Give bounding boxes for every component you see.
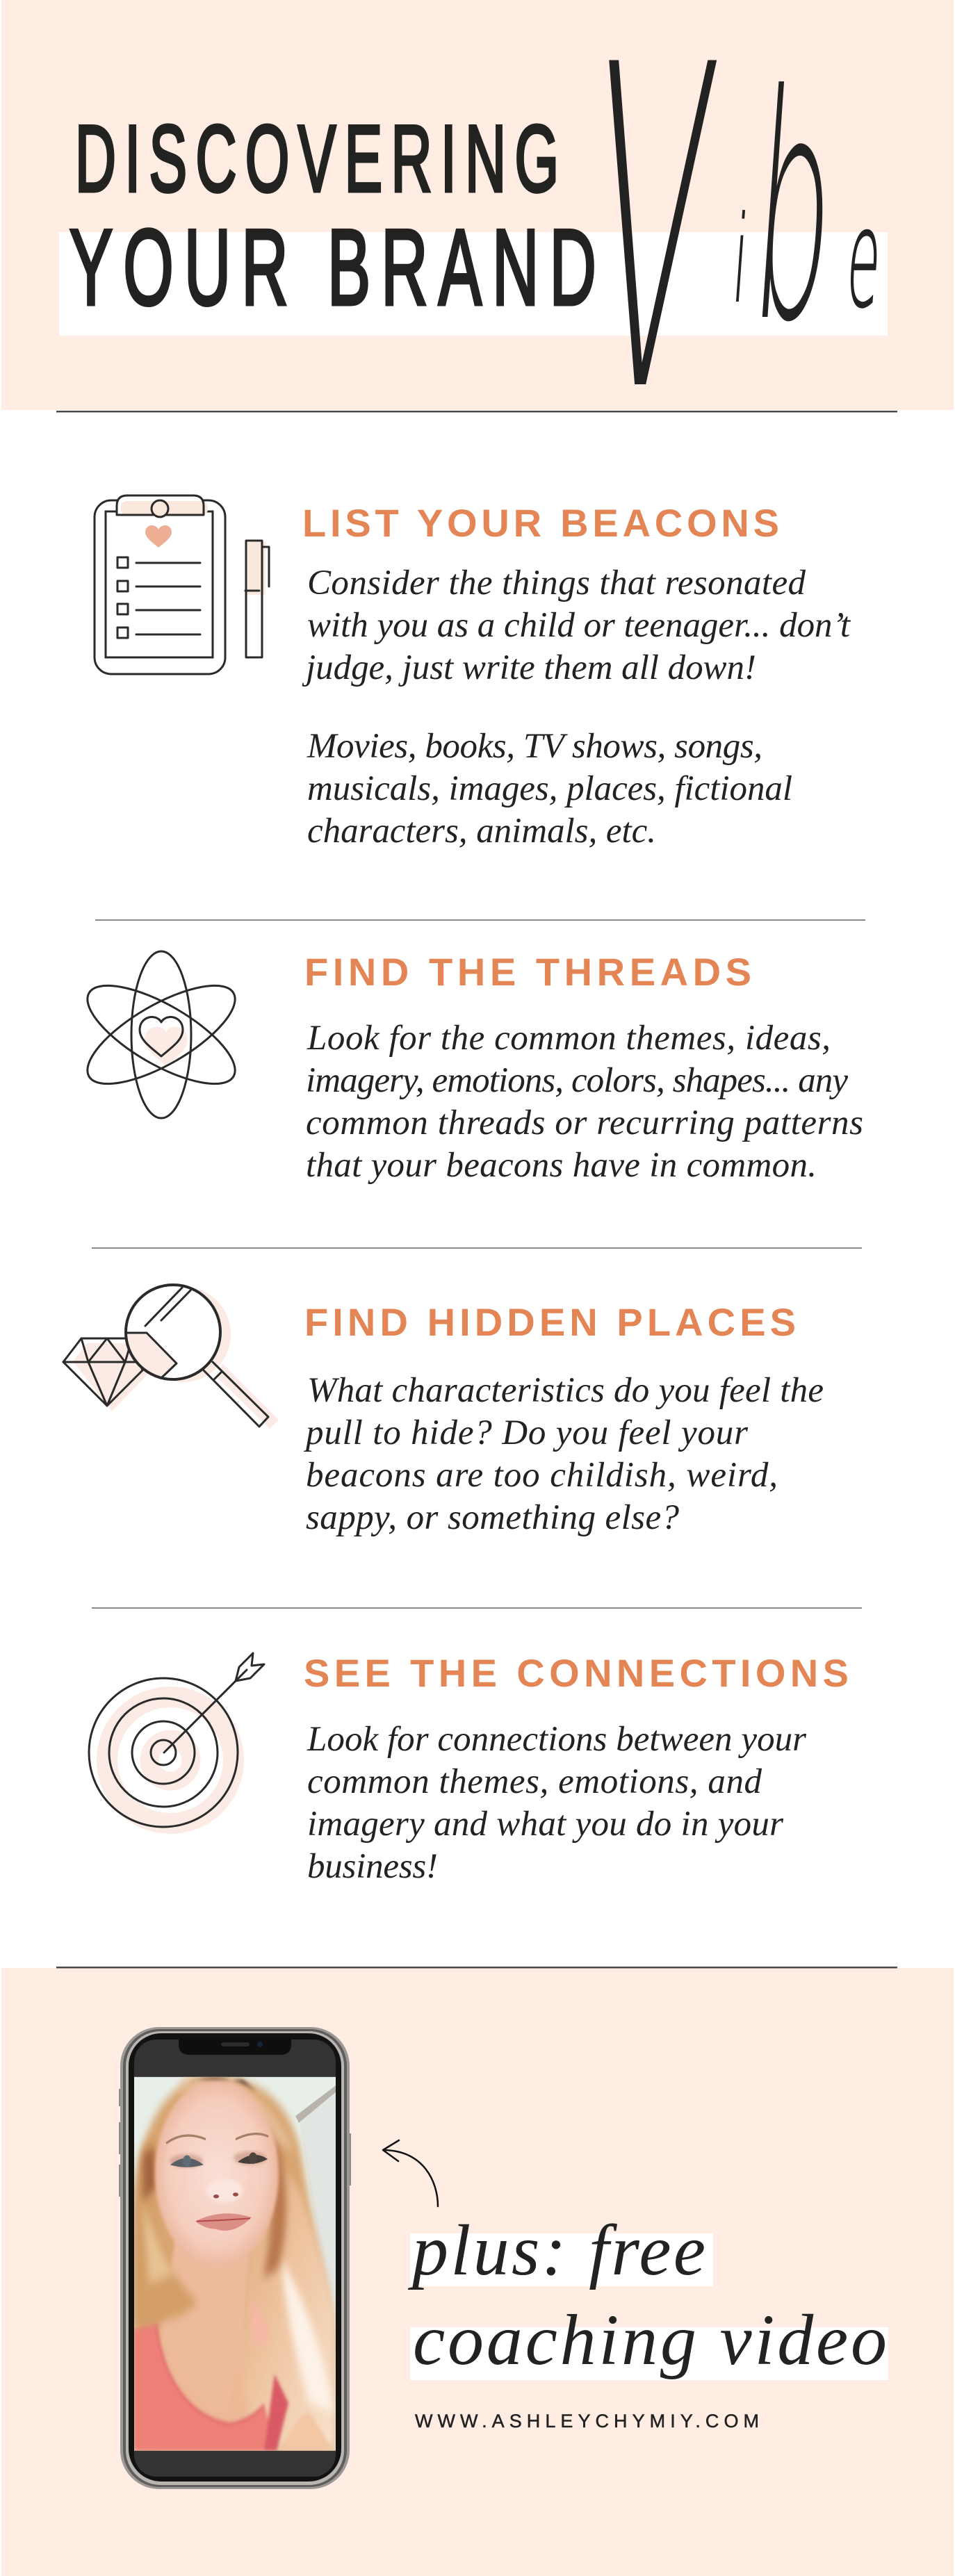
shirt bbox=[134, 2322, 277, 2451]
phone mockup bbox=[119, 2027, 351, 2489]
icon: atom with heart bbox=[74, 951, 248, 1118]
heading: FIND THE THREADS bbox=[304, 950, 751, 994]
hair right mass bbox=[240, 2161, 336, 2448]
body text: Look for the common themes, ideas, bbox=[307, 1019, 831, 1058]
heading: SEE THE CONNECTIONS bbox=[304, 1651, 849, 1695]
face bbox=[155, 2080, 279, 2267]
body text: characters, animals, etc. bbox=[307, 812, 656, 851]
title: script word vibe: i bbox=[729, 190, 752, 329]
section 2: find the threads bbox=[74, 950, 863, 1185]
body text: pull to hide? Do you feel your bbox=[304, 1413, 748, 1452]
hair back bbox=[134, 2077, 336, 2451]
chest bbox=[157, 2324, 279, 2451]
website url: WWW.ASHLEYCHYMIY.COM bbox=[415, 2411, 759, 2431]
body text: beacons are too childish, weird, bbox=[306, 1456, 778, 1495]
body text: with you as a child or teenager... don’t bbox=[307, 606, 851, 645]
body text: imagery and what you do in your bbox=[307, 1805, 783, 1844]
body text: judge, just write them all down! bbox=[302, 648, 756, 687]
body text: business! bbox=[307, 1847, 438, 1886]
section 3: find hidden places bbox=[63, 1284, 824, 1537]
heading: LIST YOUR BEACONS bbox=[302, 501, 779, 545]
body text: that your beacons have in common. bbox=[306, 1146, 817, 1185]
body text bbox=[306, 1019, 863, 1185]
section 4: see the connections bbox=[89, 1651, 849, 1886]
icon: target and arrow bbox=[89, 1653, 264, 1827]
icon: diamond and magnifying glass bbox=[63, 1284, 279, 1429]
header panel bbox=[1, 0, 954, 489]
heading: FIND HIDDEN PLACES bbox=[304, 1300, 796, 1344]
body text: Consider the things that resonated bbox=[307, 564, 806, 602]
phone buttons bbox=[119, 2089, 351, 2197]
title highlight band bbox=[59, 232, 888, 336]
neck bbox=[161, 2242, 250, 2336]
footer panel bbox=[1, 1967, 954, 2576]
highlight: plus free bbox=[410, 2233, 713, 2286]
body text: What characteristics do you feel the bbox=[307, 1371, 824, 1410]
title: your brand: YOUR BRAND bbox=[70, 208, 596, 328]
highlight: coaching video bbox=[410, 2327, 888, 2380]
body text: imagery, emotions, colors, shapes... any bbox=[306, 1061, 848, 1100]
body text: common threads or recurring patterns bbox=[306, 1104, 863, 1142]
callout: plus free coaching video bbox=[407, 2210, 887, 2380]
body text bbox=[302, 564, 851, 851]
icon: clipboard and pen bbox=[95, 495, 269, 674]
title: script word vibe: e bbox=[842, 180, 886, 338]
body text bbox=[307, 1720, 806, 1886]
body text: Look for connections between your bbox=[307, 1720, 806, 1759]
body text: common themes, emotions, and bbox=[307, 1762, 762, 1801]
body text: sappy, or something else? bbox=[306, 1498, 680, 1537]
title: script word vibe: b bbox=[743, 30, 845, 391]
hair left bbox=[133, 2135, 198, 2329]
arrow pointing to phone bbox=[383, 2140, 438, 2206]
body text bbox=[304, 1371, 824, 1537]
body text: musicals, images, places, fictional bbox=[307, 769, 792, 808]
callout: plus free coaching video: coaching video bbox=[413, 2300, 887, 2380]
title: discovering: DISCOVERING bbox=[75, 105, 559, 211]
section 1: list your beacons bbox=[95, 495, 851, 851]
body text: Movies, books, TV shows, songs, bbox=[307, 727, 762, 766]
callout: plus free coaching video: plus: free bbox=[407, 2210, 705, 2290]
photo: smiling woman with blonde hair bbox=[133, 2077, 336, 2451]
features bbox=[167, 2134, 268, 2143]
